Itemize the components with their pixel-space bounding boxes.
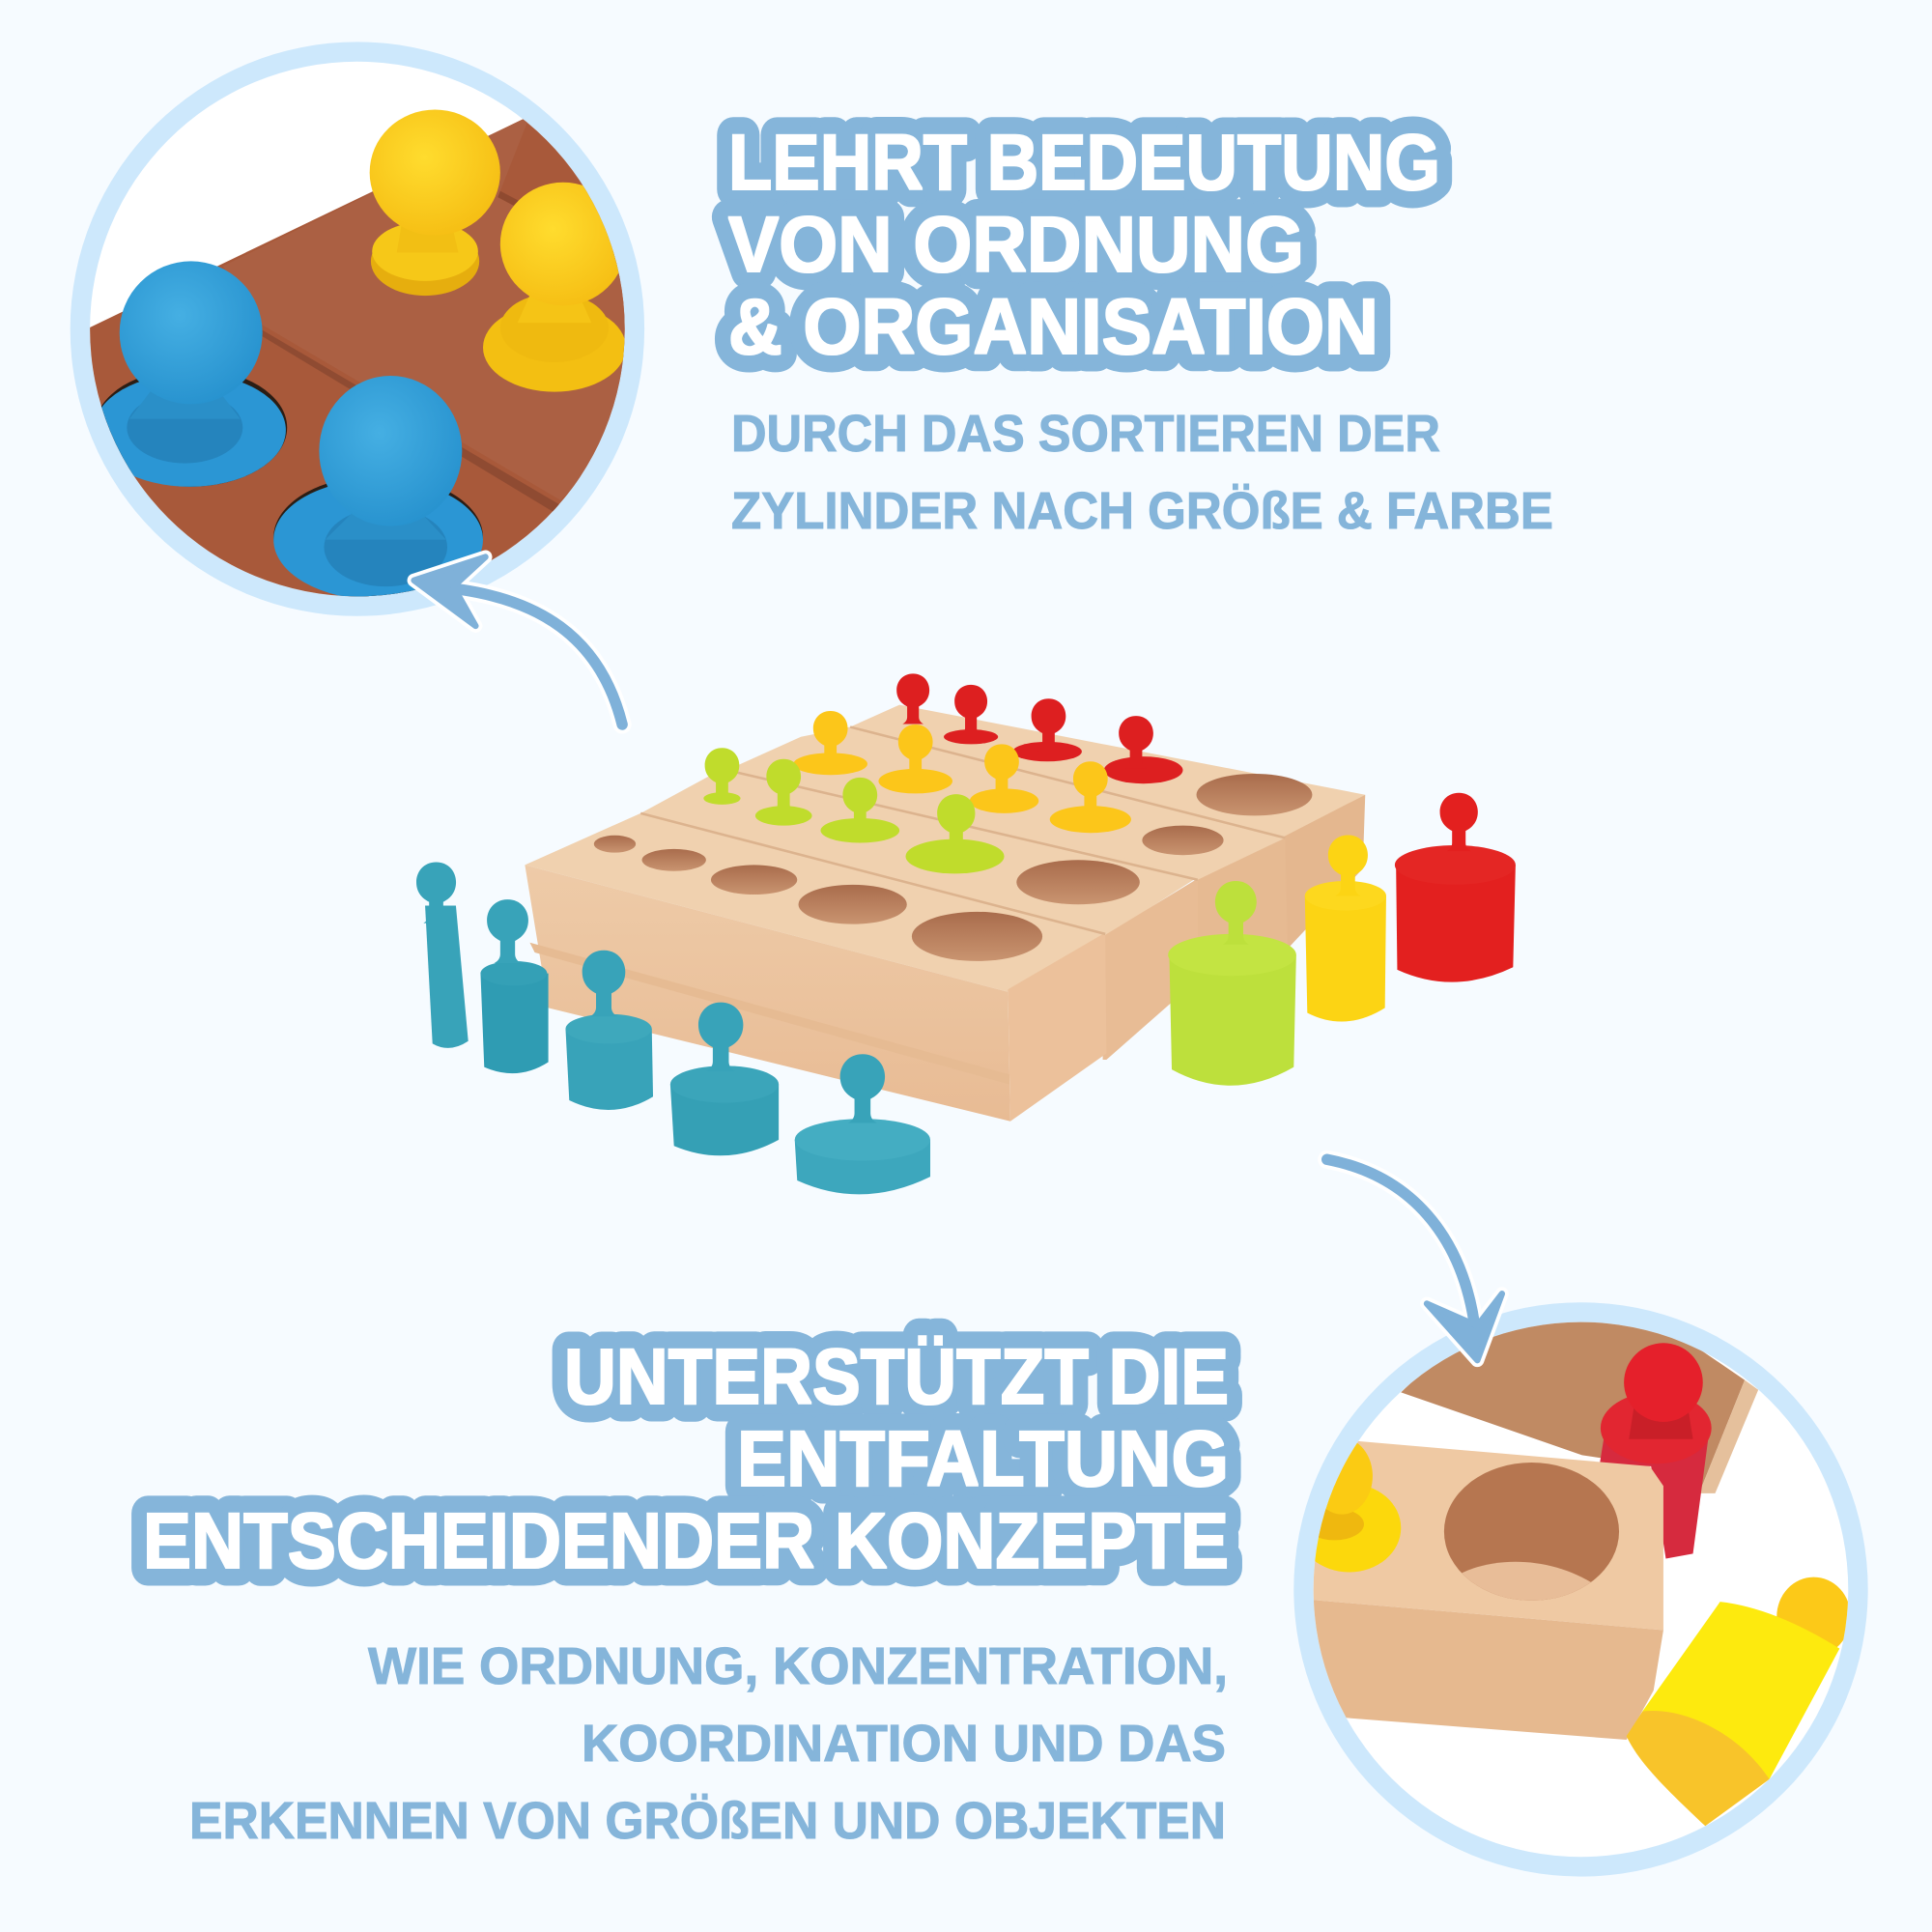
heading: bottom: ENTSCHEIDENDER KONZEPTE	[143, 1497, 1229, 1585]
heading: bottom: UNTERSTÜTZT DIE	[564, 1333, 1229, 1421]
rear wooden block	[1401, 1321, 1745, 1487]
heading: top: & ORGANISATION	[728, 283, 1378, 371]
heading: bottom: ENTFALTUNG	[737, 1415, 1229, 1503]
subtext: top: ZYLINDER NACH GRÖßE & FARBE	[731, 482, 1553, 540]
block row 1 (empty holes)	[525, 813, 1106, 1122]
peg: blue left	[94, 261, 287, 487]
yellow peg in block	[1297, 1438, 1401, 1573]
photo circle: close-up of blue and yellow pegs	[70, 42, 644, 616]
peg: yellow back	[370, 110, 500, 296]
photo circle: close-up of wooden block and cylinders	[1293, 1302, 1868, 1877]
block row 4 (red)	[850, 705, 1365, 949]
teal cylinders	[416, 863, 930, 1194]
arrow: to upper circle	[414, 557, 622, 724]
red cylinder right	[1395, 793, 1516, 982]
peg: blue front	[273, 376, 483, 600]
central photo: wooden cylinder blocks with coloured pegs	[416, 673, 1516, 1194]
arrow: to lower circle	[1327, 1159, 1502, 1360]
hole in block	[1444, 1463, 1619, 1614]
block row 3 (yellow)	[727, 727, 1288, 1012]
subtext: bottom: KOORDINATION UND DAS	[582, 1715, 1226, 1773]
front wooden block	[1306, 1436, 1663, 1630]
heading: top: VON ORDNUNG	[728, 201, 1304, 289]
subtext: bottom: WIE ORDNUNG, KONZENTRATION,	[368, 1637, 1228, 1695]
green pegs	[703, 748, 1005, 873]
yellow lying cylinder	[1627, 1577, 1851, 1826]
yellow pegs	[793, 711, 1131, 833]
lime cylinder right	[1168, 881, 1296, 1086]
block row 2 (green)	[640, 766, 1198, 1060]
red cylinder	[1600, 1343, 1712, 1559]
red pegs	[896, 673, 1182, 783]
heading: top: LEHRT BEDEUTUNG	[728, 119, 1440, 207]
subtext: bottom: ERKENNEN VON GRÖßEN UND OBJEKTEN	[189, 1792, 1226, 1850]
yellow cylinder right	[1305, 835, 1386, 1022]
subtext: top: DURCH DAS SORTIEREN DER	[731, 405, 1440, 463]
peg: yellow right	[483, 183, 626, 392]
wooden board	[90, 119, 625, 597]
